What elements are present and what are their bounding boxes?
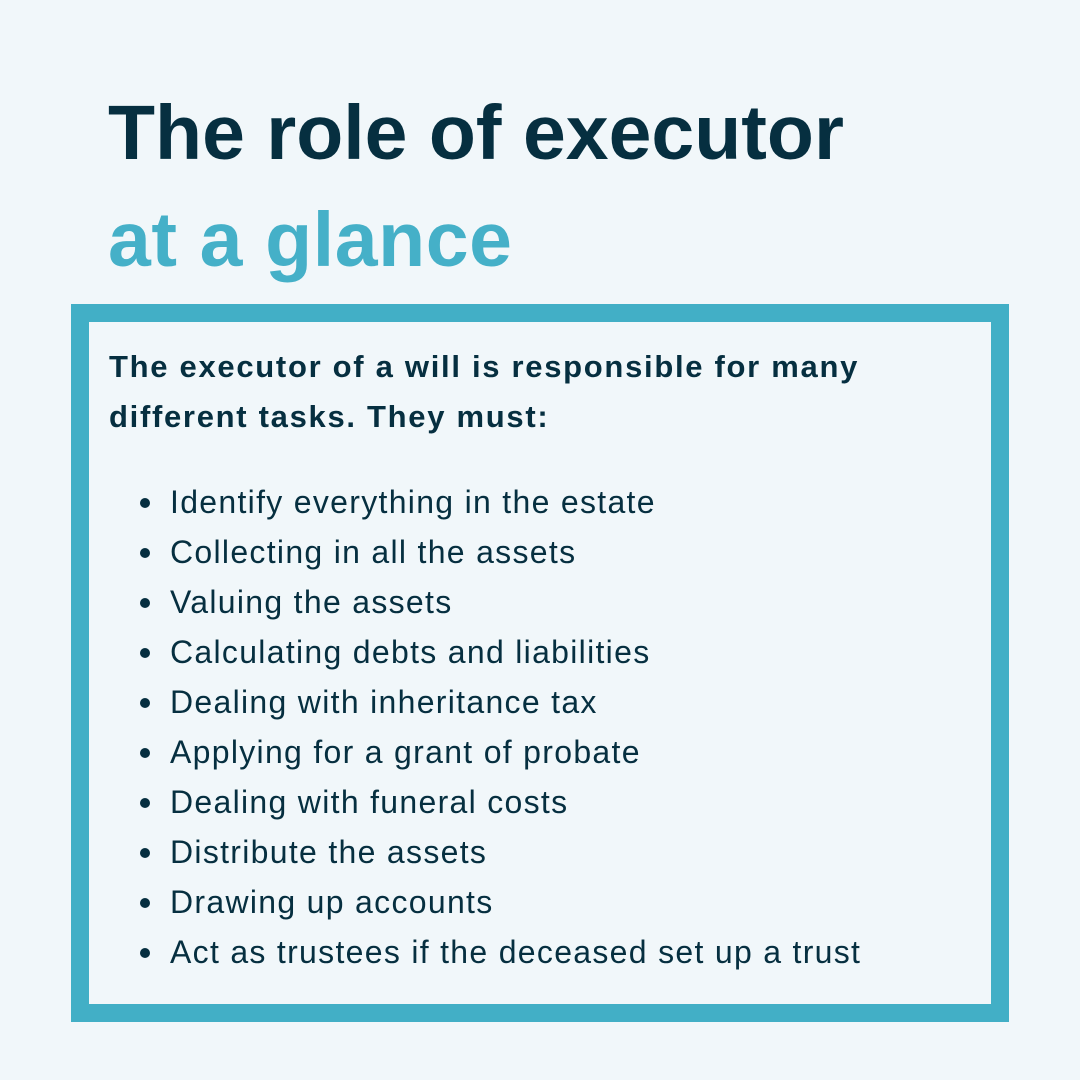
bullet list (140, 484, 861, 970)
intro text: different tasks. They must: (109, 399, 549, 434)
subtitle: at a glance (108, 197, 513, 283)
bullet list: Act as trustees if the deceased set up a trust (170, 934, 861, 970)
title: The role of executor (108, 90, 844, 176)
bullet list: Calculating debts and liabilities (170, 634, 650, 670)
panel: executor tasks (71, 304, 1009, 1022)
bullet list: Drawing up accounts (170, 884, 494, 920)
intro text: The executor of a will is responsible for many (109, 349, 859, 384)
intro text (109, 349, 859, 434)
bullet list: Applying for a grant of probate (170, 734, 641, 770)
bullet list: Valuing the assets (170, 584, 453, 620)
bullet list: Dealing with funeral costs (170, 784, 568, 820)
bullet list: Collecting in all the assets (170, 534, 576, 570)
bullet list: Identify everything in the estate (170, 484, 656, 520)
bullet list: Distribute the assets (170, 834, 487, 870)
bullet list: Dealing with inheritance tax (170, 684, 598, 720)
